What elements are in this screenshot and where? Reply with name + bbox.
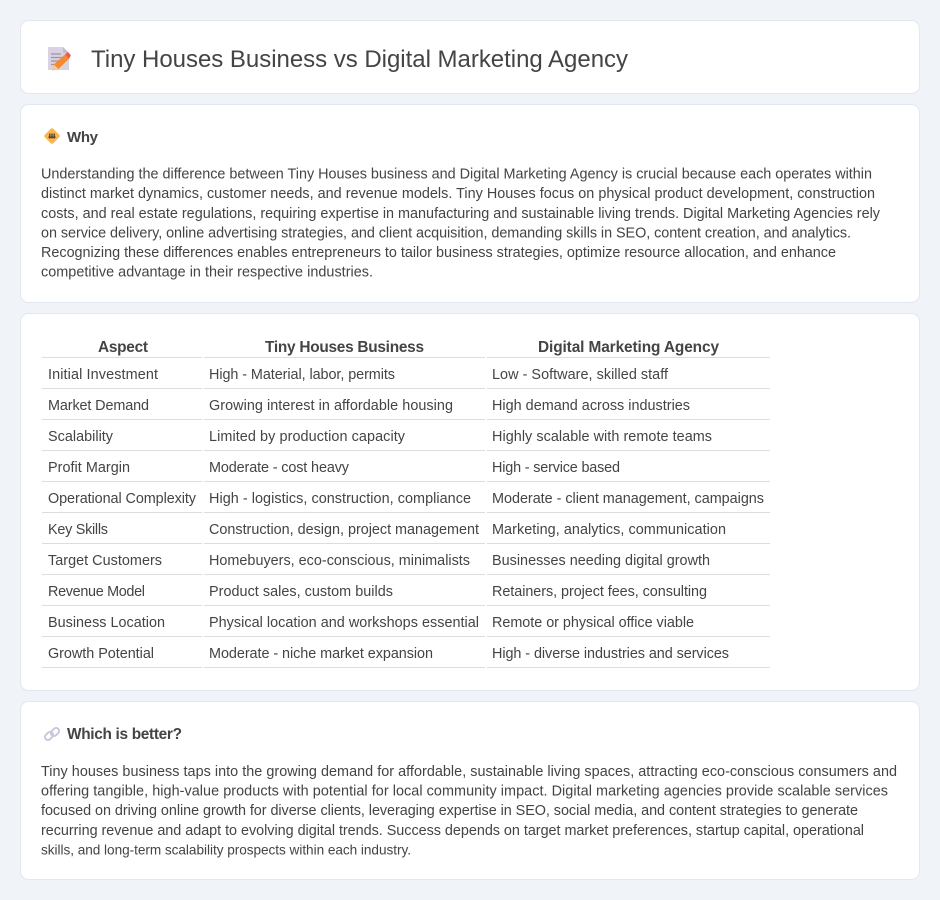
row: scalability: [42, 429, 770, 451]
row: scalability: Scalability: [48, 429, 114, 445]
row: revenue model: Retainers, project fees, consulting: [492, 584, 707, 600]
text block: why explanation: Recognizing these differences enables entrepreneurs to tailor business strategies, optimize resource allocation, and enhance: [41, 245, 836, 261]
icon: warning diamond: [44, 128, 60, 144]
panel: why: [20, 104, 920, 302]
text block: verdict: focused on driving online growth for diverse clients, leveraging expertise in SEO, social media, and content strategies to generate: [41, 803, 858, 819]
row: business location: Business Location: [48, 615, 165, 631]
row: operational complexity: Operational Complexity: [48, 491, 197, 507]
title: Tiny Houses Business vs Digital Marketing Agency: [91, 46, 628, 73]
row: initial investment: [42, 367, 770, 389]
row: scalability: Limited by production capacity: [209, 429, 406, 445]
row: initial investment: High - Material, labor, permits: [209, 367, 395, 383]
heading: which is better: Which is better?: [67, 726, 182, 743]
row: market demand: Growing interest in affordable housing: [209, 398, 453, 414]
row: profit margin: High - service based: [492, 460, 620, 476]
table header row: Digital Marketing Agency: [538, 339, 719, 356]
row: growth potential: Growth Potential: [48, 646, 154, 662]
text block: verdict: Tiny houses business taps into the growing demand for affordable, sustainable living spaces, attracting eco-conscious consumers and: [41, 764, 897, 780]
row: initial investment: Initial Investment: [48, 367, 158, 383]
panel: comparison table: [20, 314, 920, 690]
icon: chain link: [44, 727, 60, 741]
heading: why: Why: [67, 129, 99, 146]
row: market demand: [42, 398, 770, 420]
icon: document with pencil: [48, 47, 71, 70]
row: growth potential: [42, 646, 770, 668]
row: key skills: Key Skills: [48, 522, 108, 538]
text block: why explanation: competitive advantage in their respective industries.: [41, 265, 373, 281]
table header row: [42, 339, 770, 358]
row: growth potential: High - diverse industries and services: [492, 646, 729, 662]
row: profit margin: [42, 460, 770, 482]
row: initial investment: Low - Software, skilled staff: [492, 367, 669, 383]
row: operational complexity: Moderate - client management, campaigns: [492, 491, 764, 507]
row: profit margin: Profit Margin: [48, 460, 130, 476]
text block: why explanation: on service delivery, online advertising strategies, and client acquisition, demanding skills in SEO, content creation, and analytics.: [41, 225, 851, 241]
text block: verdict: recurring revenue and adapt to evolving digital trends. Success depends on target market preferences, startup capital, operational: [41, 823, 864, 839]
row: operational complexity: High - logistics, construction, compliance: [209, 491, 471, 507]
panel: which is better: [20, 702, 920, 880]
text block: why explanation: Understanding the difference between Tiny Houses business and Digital Marketing Agency is crucial because each operates within: [41, 167, 872, 183]
row: business location: Physical location and workshops essential: [209, 615, 479, 631]
text block: why explanation: [41, 167, 881, 281]
row: target customers: [42, 553, 770, 575]
row: revenue model: Product sales, custom builds: [209, 584, 393, 600]
text block: verdict: [41, 764, 897, 857]
table header row: Tiny Houses Business: [265, 339, 424, 356]
row: scalability: Highly scalable with remote teams: [492, 429, 712, 445]
text block: why explanation: costs, and real estate regulations, requiring expertise in manufacturing and sustainable living trends. Digital Marketing Agencies rely: [41, 206, 881, 222]
text block: verdict: offering tangible, high-value products with potential for local community impact. Digital marketing agencies provide scalable services: [41, 784, 888, 800]
row: target customers: Homebuyers, eco-conscious, minimalists: [209, 553, 470, 569]
row: revenue model: [42, 584, 770, 606]
row: profit margin: Moderate - cost heavy: [209, 460, 350, 476]
row: market demand: Market Demand: [48, 398, 149, 414]
text block: why explanation: distinct market dynamics, customer needs, and revenue models. Tiny Houses focus on physical product development, construction: [41, 186, 875, 202]
row: business location: [42, 615, 770, 637]
table header row: Aspect: [98, 339, 148, 356]
row: target customers: Businesses needing digital growth: [492, 553, 710, 569]
panel: title header: [20, 20, 920, 94]
row: key skills: [42, 522, 770, 544]
row: target customers: Target Customers: [48, 553, 162, 569]
row: market demand: High demand across industries: [492, 398, 690, 414]
row: revenue model: Revenue Model: [48, 584, 145, 600]
row: key skills: Construction, design, project management: [209, 522, 479, 538]
row: growth potential: Moderate - niche market expansion: [209, 646, 433, 662]
row: business location: Remote or physical office viable: [492, 615, 694, 631]
row: key skills: Marketing, analytics, communication: [492, 522, 726, 538]
row: operational complexity: [42, 491, 770, 513]
text block: verdict: skills, and long-term scalability prospects within each industry.: [41, 842, 411, 857]
